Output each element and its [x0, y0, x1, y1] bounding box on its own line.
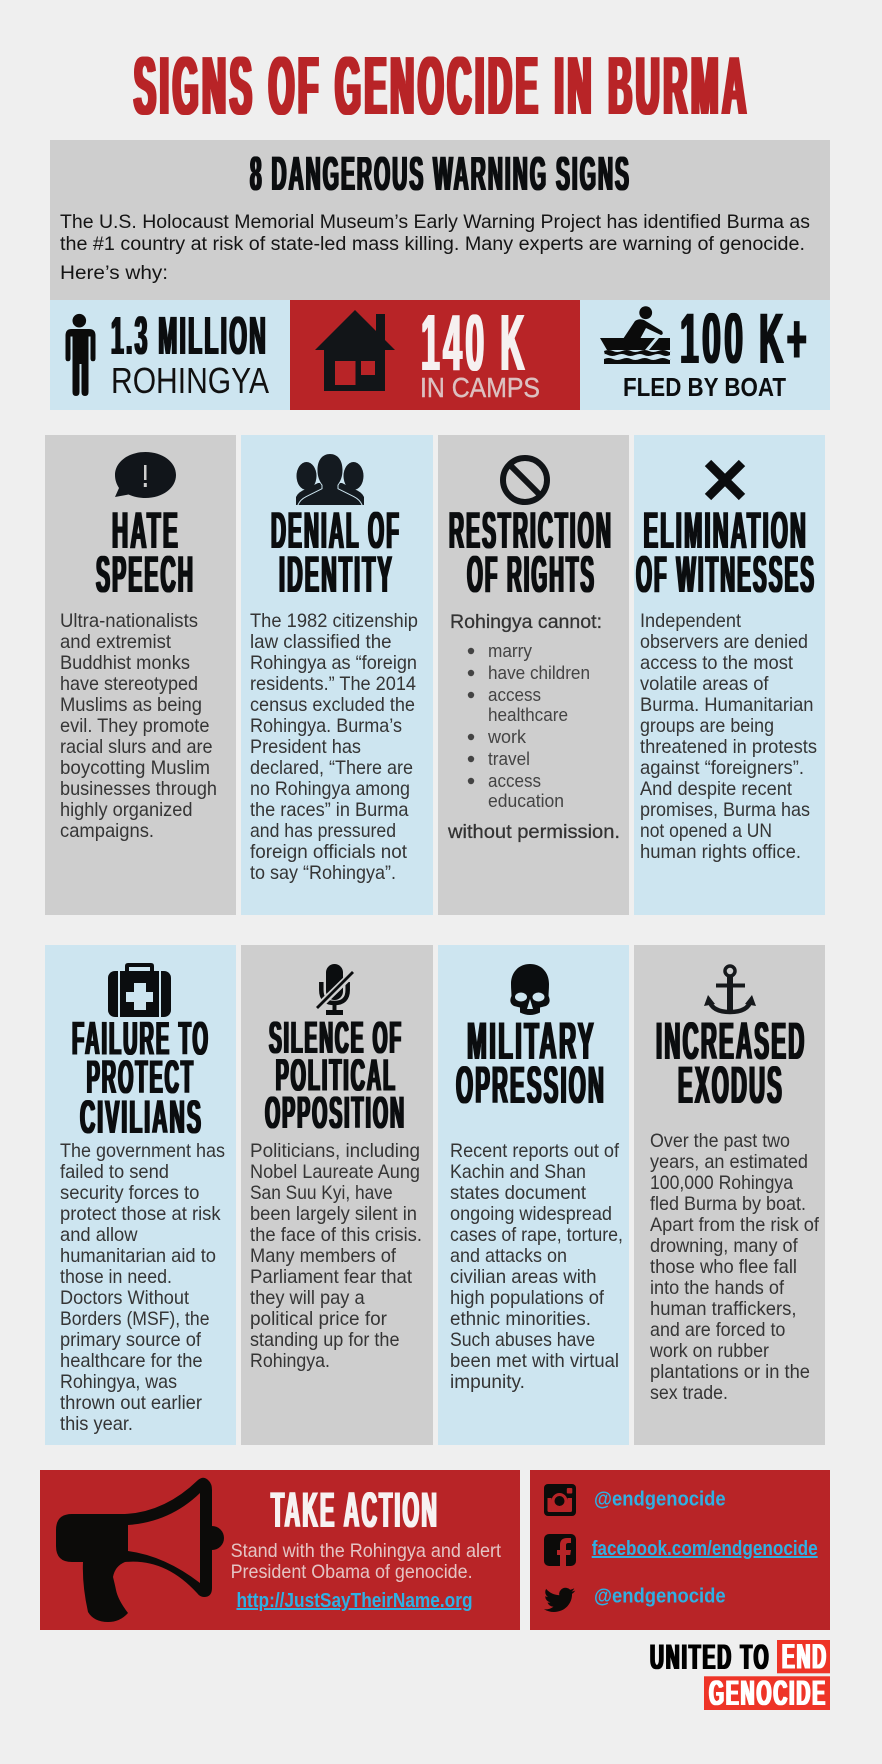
body text: Kachin and Shan [450, 1161, 586, 1183]
panel: 100K+ fled by boat [580, 300, 830, 410]
panel: military opression: MILITARY [467, 1012, 596, 1071]
body text: threatened in protests [640, 736, 817, 758]
body text: and attacks on [450, 1245, 567, 1267]
body text: fled Burma by boat. [650, 1193, 806, 1215]
body text [649, 1130, 820, 1404]
body text: ethnic minorities. [450, 1308, 591, 1330]
body text: those who flee fall [650, 1256, 797, 1278]
panel: 1.3 million Rohingya [50, 300, 290, 410]
body text: they will pay a [250, 1287, 365, 1309]
icon: rowing boat [600, 306, 670, 364]
icon: person [66, 314, 96, 396]
panel: restriction of rights [438, 435, 629, 915]
text: RESTRICTION [449, 502, 613, 560]
list of restricted rights: have children [488, 663, 590, 683]
body text: high populations of [450, 1287, 605, 1309]
body text: 100,000 Rohingya [650, 1172, 793, 1194]
body text: Nobel Laureate Aung [250, 1161, 420, 1183]
intro text: the #1 country at risk of state-led mass killing. Many experts are warning of genocide. [60, 234, 805, 255]
body text: protect those at risk [60, 1203, 221, 1225]
stat label: in camps: IN CAMPS [420, 372, 540, 403]
intro text: Here’s why: [60, 263, 168, 284]
list of restricted rights: work [487, 727, 527, 747]
body text: civilian areas with [450, 1266, 596, 1288]
heading [72, 1012, 210, 1143]
list of restricted rights: healthcare [488, 705, 568, 725]
body text: declared, “There are [250, 757, 413, 779]
body text: Many members of [250, 1245, 397, 1267]
link: facebook: facebook.com/endgenocide [592, 1538, 818, 1560]
body text: and allow [60, 1224, 138, 1246]
body text: Burma. Humanitarian [640, 694, 814, 716]
icon: group of people [296, 454, 364, 505]
text: OPRESSION [456, 1056, 606, 1115]
body text: the races” in Burma [250, 799, 409, 821]
body text: healthcare for the [60, 1350, 203, 1372]
body text: this year. [60, 1413, 133, 1435]
call to action text [231, 1540, 502, 1583]
panel: introduction [50, 140, 830, 300]
body text [250, 610, 418, 884]
icon: skull [510, 964, 550, 1015]
body text: Politicians, including [250, 1140, 420, 1162]
body text: highly organized [60, 799, 192, 821]
body text: Apart from the risk of [650, 1214, 820, 1236]
body text: standing up for the [250, 1329, 400, 1351]
heading: HATE [112, 502, 180, 560]
panel: social media [530, 1470, 830, 1630]
icon: facebook [544, 1534, 576, 1566]
body text: work on rubber [649, 1340, 769, 1362]
body text: Parliament fear that [250, 1266, 413, 1288]
heading [96, 502, 195, 604]
call to action text: Stand with the Rohingya and alert [231, 1540, 502, 1562]
panel: take action [40, 1470, 520, 1630]
body text: years, an estimated [650, 1151, 808, 1173]
body text: residents.” The 2014 [250, 673, 416, 695]
body text: Rohingya. Burma’s [250, 715, 402, 737]
panel: silence of political opposition: OPPOSITION [265, 1087, 406, 1138]
body text: states document [450, 1182, 587, 1204]
logo: United to End Genocide: END [782, 1638, 828, 1677]
list of restricted rights: travel [488, 749, 530, 769]
body text: evil. They promote [60, 715, 210, 737]
body text: no Rohingya among [250, 778, 410, 800]
body text: against “foreigners”. [640, 757, 804, 779]
body text: failed to send [60, 1161, 169, 1183]
panel: failure to protect civilians: CIVILIANS [80, 1090, 203, 1143]
body text: sex trade. [650, 1382, 728, 1404]
body text [250, 1140, 422, 1372]
body text: campaigns. [60, 820, 154, 842]
panel: take action: TAKE ACTION [271, 1482, 439, 1538]
body text: Independent [640, 610, 742, 632]
panel: 140K in camps: 140 K [421, 298, 528, 387]
icon: instagram [544, 1484, 576, 1516]
intro text: The U.S. Holocaust Memorial Museum’s Early Warning Project has identified Burma as [60, 212, 810, 233]
body text: volatile areas of [640, 673, 769, 695]
stat label: Rohingya: ROHINGYA [111, 360, 269, 401]
list of restricted rights: education [488, 791, 564, 811]
body text: human rights office. [640, 841, 801, 863]
panel: 140K in camps [290, 298, 580, 410]
body text: and are forced to [650, 1319, 786, 1341]
intro text [60, 212, 810, 284]
text: DENIAL OF [271, 502, 401, 560]
body text: census excluded the [250, 694, 415, 716]
body text: been largely silent in [250, 1203, 417, 1225]
icon: twitter [544, 1588, 575, 1612]
heading [456, 1012, 606, 1115]
body text: groups are being [640, 715, 774, 737]
body text: thrown out earlier [60, 1392, 202, 1414]
icon: prohibition sign [503, 458, 547, 502]
stat label: fled by boat: FLED BY BOAT [623, 372, 786, 402]
list outro: without permission. [447, 822, 620, 843]
body text: businesses through [60, 778, 217, 800]
panel: silence of political opposition [241, 945, 433, 1445]
panel: failure to protect civilians [45, 945, 236, 1445]
body text: Ultra-nationalists [60, 610, 198, 632]
body text: impunity. [450, 1371, 525, 1393]
body text: the face of this crisis. [250, 1224, 422, 1246]
heading [656, 1012, 806, 1115]
icon: medical kit [108, 963, 171, 1017]
body text: law classified the [250, 631, 392, 653]
body text: not opened a UN [640, 820, 772, 842]
body text: access to the most [640, 652, 794, 674]
panel: silence of political opposition: SILENCE OF [269, 1012, 403, 1063]
call to action text: President Obama of genocide. [231, 1561, 473, 1583]
panel: hate speech [45, 435, 236, 915]
panel: hate speech: SPEECH [96, 546, 195, 604]
body text: humanitarian aid to [60, 1245, 216, 1267]
body text: primary source of [60, 1329, 202, 1351]
body text: observers are denied [640, 631, 808, 653]
body text [640, 610, 817, 863]
logo: United to End Genocide: UNITED TO [650, 1638, 770, 1677]
body text: And despite recent [640, 778, 793, 800]
body text: Rohingya, was [60, 1371, 177, 1393]
icon: megaphone [56, 1478, 224, 1622]
body text: Doctors Without [60, 1287, 190, 1309]
body text: plantations or in the [650, 1361, 810, 1383]
icon: anchor [704, 966, 756, 1012]
body text: cases of rape, torture, [450, 1224, 623, 1246]
heading [265, 1012, 406, 1138]
body text: drowning, many of [650, 1235, 798, 1257]
body text: Recent reports out of [450, 1140, 620, 1162]
panel: military opression [438, 945, 629, 1445]
body text: The government has [60, 1140, 225, 1162]
list of restricted rights: marry [488, 641, 532, 661]
handle: instagram: @endgenocide [594, 1489, 726, 1511]
body text: promises, Burma has [640, 799, 810, 821]
panel: silence of political opposition: POLITICAL [276, 1050, 397, 1101]
body text: into the hands of [650, 1277, 785, 1299]
icon: X mark [708, 463, 742, 497]
body text: and extremist [60, 631, 172, 653]
panel: failure to protect civilians: FAILURE TO [72, 1012, 210, 1064]
handle: twitter: @endgenocide [594, 1586, 726, 1608]
icon: house [315, 310, 395, 391]
body text: to say “Rohingya”. [250, 862, 396, 884]
list of restricted rights [468, 641, 590, 811]
body text: foreign officials not [250, 841, 408, 863]
body text: political price for [250, 1308, 387, 1330]
body text: those in need. [60, 1266, 172, 1288]
list of restricted rights: access [488, 771, 541, 791]
body text [60, 610, 217, 842]
body text: been met with virtual [450, 1350, 619, 1372]
panel: increased exodus [634, 945, 825, 1445]
panel: failure to protect civilians: PROTECT [87, 1050, 195, 1103]
list intro: Rohingya cannot: [450, 612, 602, 633]
text: OF RIGHTS [467, 546, 596, 604]
body text: ongoing widespread [450, 1203, 612, 1225]
body text: Borders (MSF), the [60, 1308, 210, 1330]
list of restricted rights: access [488, 685, 541, 705]
body text: human traffickers, [650, 1298, 796, 1320]
icon: muted microphone [317, 964, 356, 1015]
body text: President has [250, 736, 361, 758]
body text: and has pressured [250, 820, 396, 842]
body text: Buddhist monks [60, 652, 190, 674]
text: 1.3 MILLION [111, 306, 268, 366]
panel: denial of identity [241, 435, 433, 915]
body text: have stereotyped [60, 673, 198, 695]
body text: Rohingya. [250, 1350, 330, 1372]
body text: San Suu Kyi, have [250, 1182, 393, 1204]
body text: security forces to [60, 1182, 200, 1204]
body text [60, 1140, 225, 1435]
heading [271, 502, 401, 604]
heading [636, 502, 816, 604]
icon: speech bubble [115, 452, 176, 498]
logo: United to End Genocide [650, 1638, 830, 1713]
panel: denial of identity: IDENTITY [279, 546, 394, 604]
body text: Muslims as being [60, 694, 202, 716]
body text: Over the past two [650, 1130, 790, 1152]
body text: The 1982 citizenship [250, 610, 418, 632]
body text: Such abuses have [450, 1329, 595, 1351]
panel: elimination of witnesses [634, 435, 825, 915]
body text: Rohingya as “foreign [250, 652, 417, 674]
heading [449, 502, 613, 604]
body text: racial slurs and are [60, 736, 213, 758]
body text: boycotting Muslim [60, 757, 210, 779]
link: just say their name: http://JustSayTheirName.org [236, 1590, 472, 1612]
body text [450, 1140, 623, 1393]
